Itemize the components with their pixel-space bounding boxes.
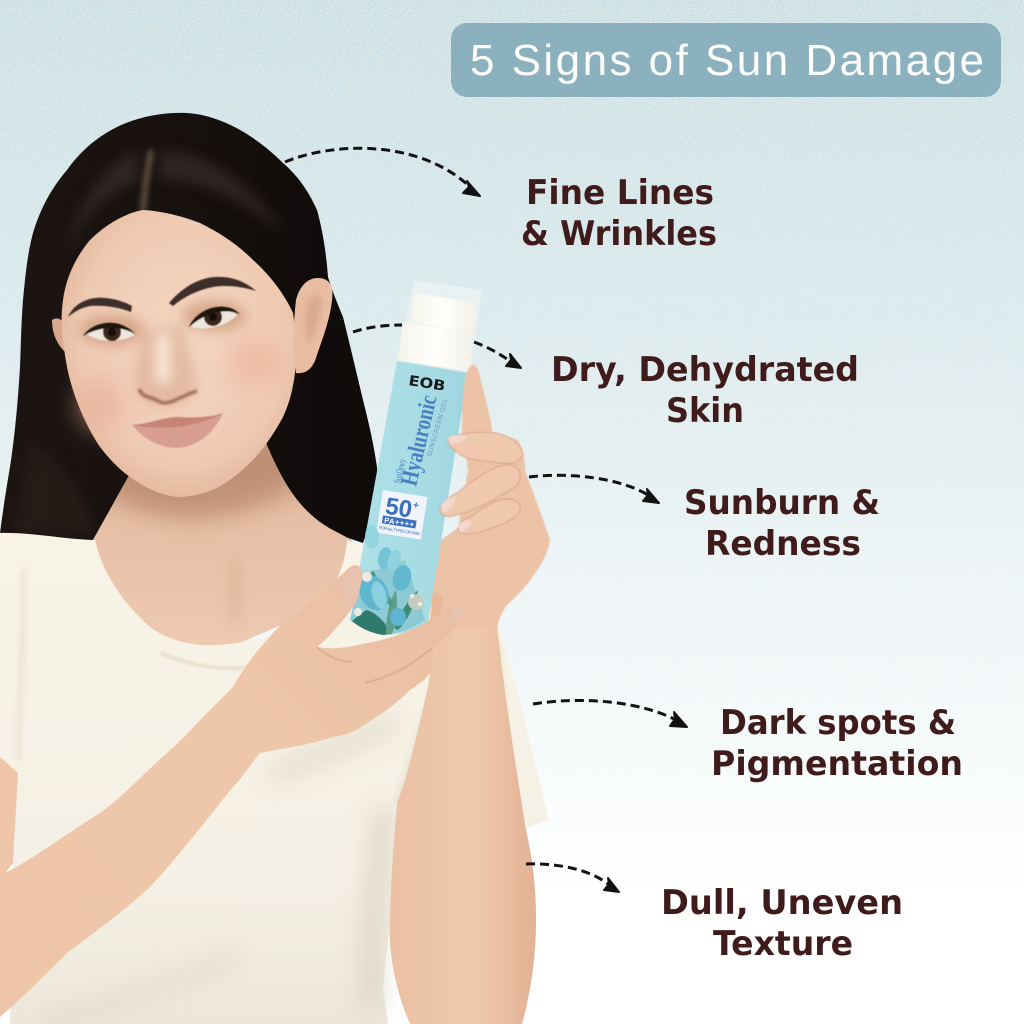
arrow: dry skin (353, 325, 521, 368)
product type: SUNSCREEN GEL (426, 398, 450, 458)
index finger (448, 432, 523, 464)
nose (135, 325, 198, 404)
nails (441, 435, 472, 532)
hair shine and lower tone (15, 150, 285, 535)
label: dark spots and pigmentation: Pigmentation (711, 744, 963, 784)
hair (0, 113, 377, 545)
right forearm (390, 625, 536, 1024)
overcap (398, 280, 482, 372)
hair parting (143, 150, 151, 212)
background gradient (0, 0, 1024, 766)
eyebrows (68, 277, 256, 317)
spf badge: 50 (383, 493, 414, 524)
label: sunburn and redness: Sunburn & (684, 483, 880, 523)
finger creases (317, 647, 433, 683)
label: dry dehydrated skin: Dry, Dehydrated (551, 350, 859, 390)
product prefix: SunDewy (392, 458, 409, 485)
lips (132, 413, 223, 448)
label: dull uneven texture: Texture (713, 924, 853, 964)
arrow: dull texture (526, 864, 619, 892)
label: sunburn and redness: Redness (705, 524, 861, 564)
spf badge: + (412, 500, 420, 512)
spf badge: PA++++ (384, 516, 415, 529)
product name: Hyaluronic (397, 393, 443, 488)
woman with bottle (0, 113, 550, 1024)
eye socket shadow (80, 301, 246, 345)
label: dark spots and pigmentation: Dark spots & (720, 703, 956, 743)
lower arm and hand (0, 565, 466, 1017)
spf badge (376, 490, 427, 540)
title banner (451, 23, 1001, 97)
ear (294, 278, 332, 373)
label: dry dehydrated skin: Skin (666, 391, 744, 431)
cheek blush (78, 338, 281, 431)
bottle (350, 280, 482, 635)
middle finger (440, 465, 520, 517)
collar (398, 322, 473, 371)
left upper arm (0, 757, 18, 880)
neck (90, 440, 352, 660)
label: dull uneven texture: Dull, Uneven (661, 883, 903, 923)
arrow: sunburn (529, 475, 659, 503)
face (62, 210, 296, 497)
brand: EOB (407, 373, 446, 395)
thumb nail (343, 569, 361, 603)
arrow: dark spots (533, 700, 687, 727)
label: fine lines and wrinkles: & Wrinkles (521, 214, 717, 254)
left ear sliver (52, 318, 65, 352)
upper hand palm (430, 365, 550, 630)
fingers of upper hand (430, 365, 523, 620)
shirt folds and shading (18, 570, 510, 1024)
eyes (83, 307, 240, 341)
arrow: fine lines (285, 148, 480, 196)
label: fine lines and wrinkles: Fine Lines (526, 173, 714, 213)
t-shirt (0, 533, 549, 1024)
tube body (350, 361, 468, 635)
title banner: 5 Signs of Sun Damage (470, 36, 984, 85)
tulip art (350, 525, 425, 635)
raised finger over bottle edge (462, 365, 492, 432)
index nail (450, 606, 464, 622)
pump (410, 293, 475, 333)
ring finger (458, 499, 520, 534)
little finger (430, 592, 443, 620)
spf badge: FOR ALL TYPES OF SKIN (379, 525, 420, 536)
